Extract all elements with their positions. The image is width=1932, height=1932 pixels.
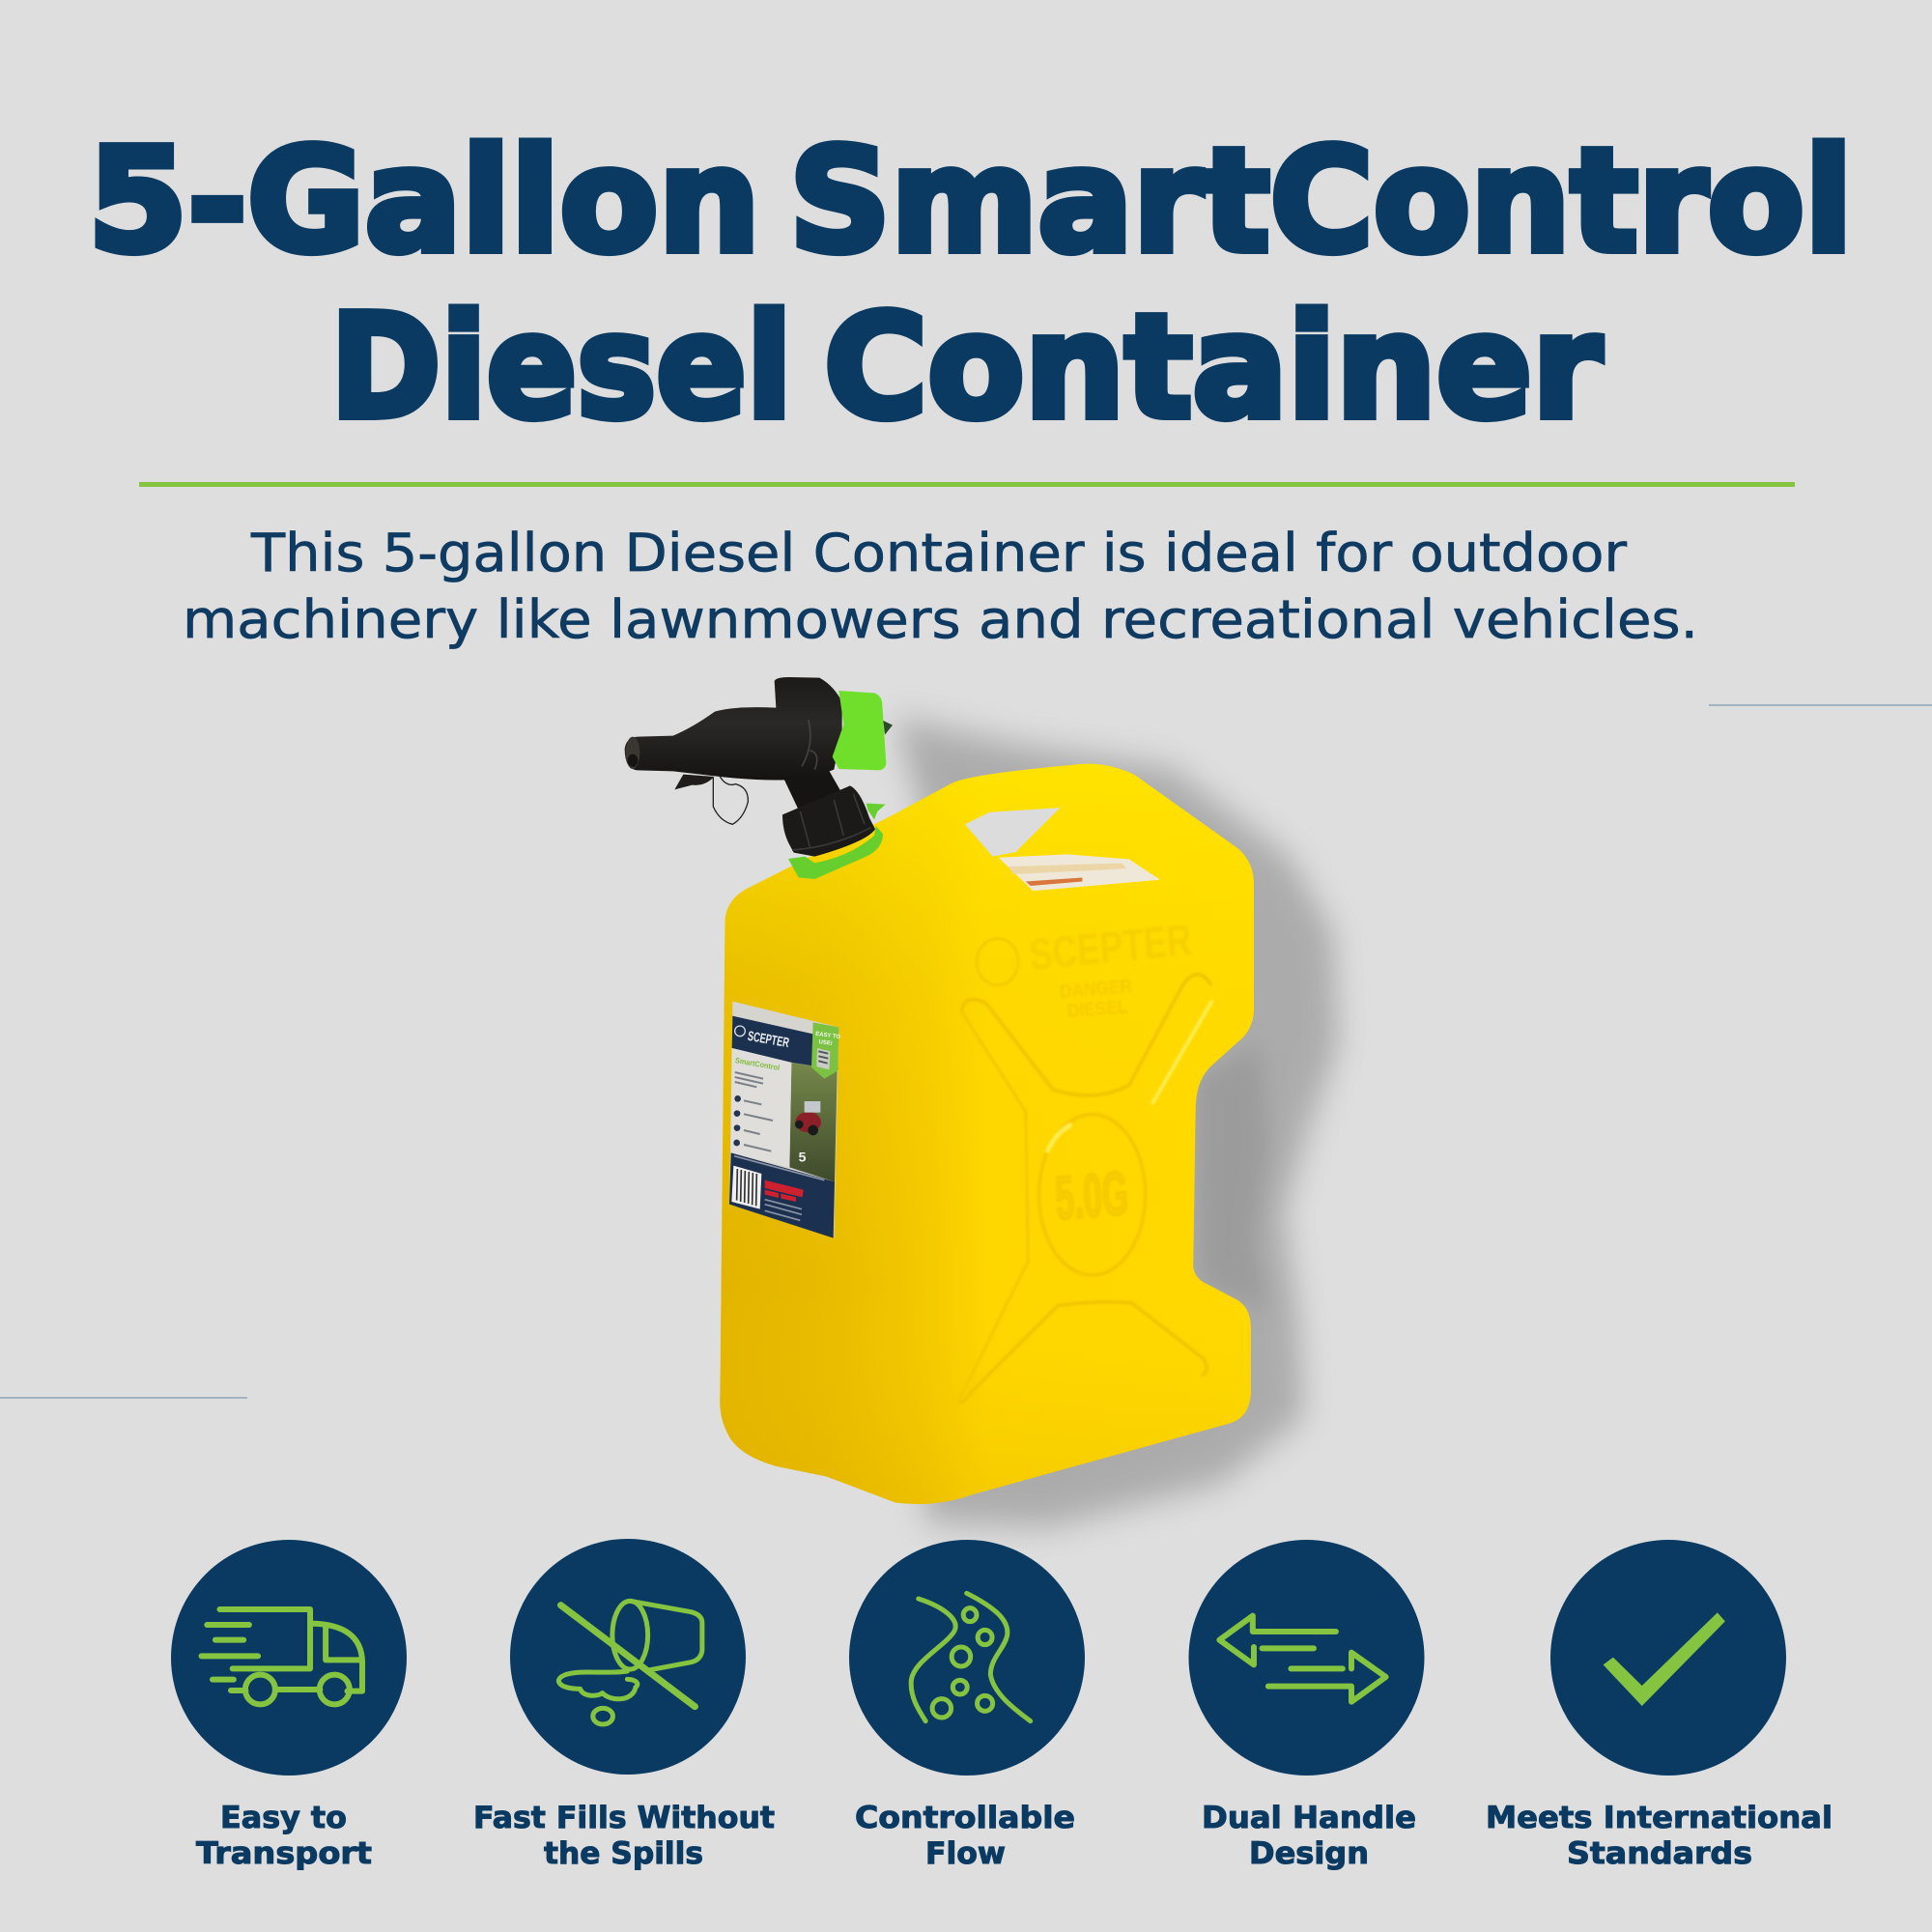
title: Container — [824, 284, 1602, 450]
label navy header: SCEPTER — [747, 1028, 790, 1050]
green divider rule — [139, 482, 1795, 487]
embossed X pattern and lettering: DANGER — [1059, 975, 1133, 1002]
icon: flow channel with bubbles — [911, 1593, 1031, 1721]
embossed X pattern and lettering: DIESEL — [1066, 995, 1128, 1021]
product label on jug side — [729, 1002, 841, 1238]
feature: dual handle design — [1188, 1540, 1424, 1871]
icon: check mark — [1604, 1612, 1725, 1706]
embossed X pattern and lettering: 5.0G — [1053, 1158, 1130, 1233]
label photo: 5 — [799, 1150, 807, 1165]
label: Fast Fills Without — [473, 1801, 775, 1835]
feature: controllable flow — [849, 1540, 1085, 1871]
icon circle — [1188, 1540, 1424, 1776]
embossed X pattern and lettering: SCEPTER — [1028, 916, 1193, 980]
label: Transport — [196, 1836, 372, 1871]
label text panel — [731, 1048, 791, 1167]
label — [855, 1801, 1075, 1871]
green collar ring — [788, 804, 886, 879]
label: Flow — [925, 1836, 1006, 1871]
subtitle text: machinery like lawnmowers and recreational vehicles. — [183, 589, 1698, 650]
decorative line right — [1709, 704, 1932, 706]
icon: opposing arrows — [1219, 1616, 1386, 1702]
embossed X pattern and lettering — [959, 916, 1211, 1403]
icon circle — [1550, 1540, 1786, 1776]
label: Controllable — [855, 1801, 1075, 1835]
label — [196, 1801, 372, 1871]
neck — [784, 768, 840, 810]
title — [88, 118, 1853, 450]
feature: fast fills without spills — [473, 1539, 775, 1871]
threaded cap — [782, 785, 875, 857]
label navy header — [732, 1016, 838, 1069]
top warning sticker — [999, 854, 1160, 891]
label text panel: SmartControl — [734, 1056, 781, 1072]
icon circle — [510, 1539, 746, 1775]
green trigger — [833, 691, 893, 770]
label: Standards — [1567, 1836, 1752, 1871]
spout assembly: nozzle, cap, green trigger — [625, 677, 893, 879]
nozzle body — [625, 677, 842, 780]
label: the Spills — [544, 1836, 703, 1871]
subtitle text: This 5-gallon Diesel Container is ideal for outdoor — [250, 523, 1628, 583]
feature: easy to transport — [171, 1540, 407, 1871]
label: Design — [1249, 1836, 1369, 1871]
label — [1202, 1801, 1416, 1871]
label green QR badge: USE! — [818, 1039, 833, 1047]
subtitle text — [183, 523, 1698, 650]
label: Meets International — [1486, 1801, 1833, 1835]
label green QR badge — [811, 1022, 841, 1079]
lower lever tab — [674, 775, 714, 789]
title: 5-Gallon — [88, 118, 760, 284]
jug body — [720, 764, 1254, 1504]
product: yellow diesel container — [720, 718, 1339, 1527]
feature: meets international standards — [1486, 1540, 1833, 1871]
cast shadow — [895, 718, 1339, 1527]
icon circle — [849, 1540, 1085, 1776]
decorative line left — [0, 1397, 247, 1399]
icon: truck — [202, 1609, 362, 1704]
tether wire — [713, 776, 748, 824]
title: SmartControl — [789, 118, 1853, 284]
icon: spilled bucket crossed out — [558, 1601, 702, 1724]
label: Dual Handle — [1202, 1801, 1416, 1835]
handle opening — [965, 808, 1060, 857]
label footer — [729, 1152, 835, 1238]
label — [473, 1801, 775, 1871]
label photo — [789, 1063, 838, 1181]
label green QR badge: EASY TO — [815, 1032, 841, 1040]
label: Easy to — [220, 1801, 347, 1835]
icon circle — [171, 1540, 407, 1776]
title: Diesel — [330, 284, 792, 450]
label base — [729, 1002, 838, 1238]
label — [1486, 1801, 1833, 1871]
